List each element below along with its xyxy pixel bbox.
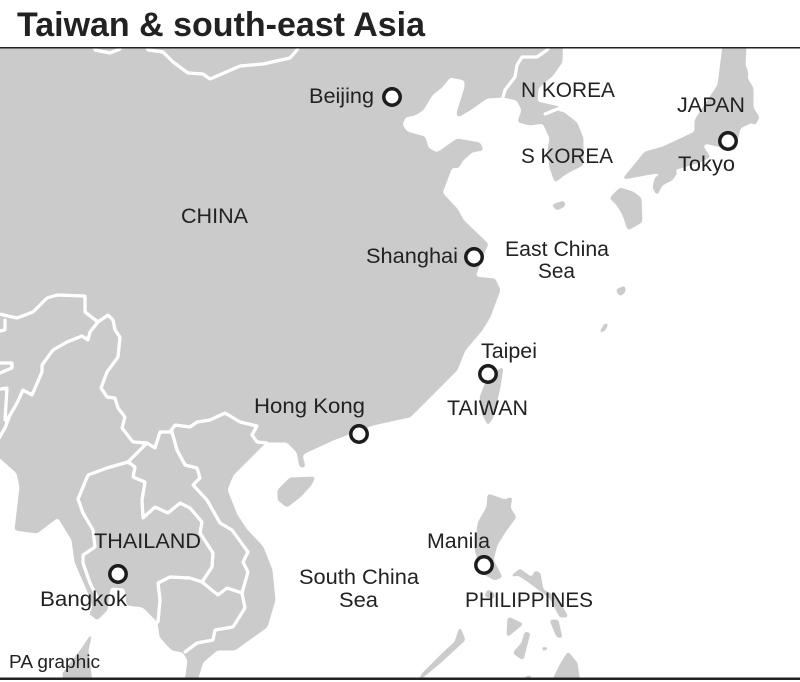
- marker: Tokyo: [720, 133, 736, 149]
- marker: Manila: [476, 557, 492, 573]
- land: small islands: [552, 201, 625, 334]
- label: East China Sea: East China: [505, 237, 609, 261]
- label: THAILAND: THAILAND: [94, 529, 201, 553]
- label: S KOREA: S KOREA: [521, 144, 614, 168]
- country borders: [0, 44, 560, 652]
- label: Bangkok: Bangkok: [40, 587, 127, 611]
- credit: PA graphic: [9, 651, 100, 672]
- label: South China Sea: Sea: [339, 588, 378, 612]
- marker: Beijing: [384, 89, 400, 105]
- land: Asian mainland: [0, 30, 583, 682]
- label: PHILIPPINES: PHILIPPINES: [465, 588, 593, 612]
- title: Taiwan & south-east Asia: [17, 6, 426, 44]
- land: Philippines: [417, 494, 581, 682]
- land: Japan: [610, 30, 759, 230]
- marker: Taipei: [480, 366, 496, 382]
- marker: Shanghai: [466, 249, 482, 265]
- label: N KOREA: N KOREA: [521, 78, 616, 102]
- label: South China Sea: South China: [299, 565, 419, 589]
- label: Manila: Manila: [427, 529, 490, 553]
- label: CHINA: CHINA: [181, 204, 249, 228]
- marker: Hong Kong: [351, 426, 367, 442]
- land: Malay peninsula: [63, 633, 93, 682]
- label: East China Sea: [505, 237, 609, 283]
- label: South China Sea: [299, 565, 419, 612]
- label: Beijing: Beijing: [309, 84, 374, 108]
- label: Tokyo: Tokyo: [678, 152, 735, 176]
- land: Taiwan: [480, 367, 503, 425]
- marker: Bangkok: [110, 566, 126, 582]
- label: East China Sea: Sea: [538, 259, 575, 283]
- label: Hong Kong: Hong Kong: [254, 394, 365, 418]
- label: Shanghai: Shanghai: [366, 244, 458, 268]
- label: Taipei: Taipei: [481, 339, 537, 363]
- label: TAIWAN: TAIWAN: [447, 396, 528, 420]
- land: Hainan: [278, 477, 315, 507]
- label: JAPAN: JAPAN: [677, 93, 745, 117]
